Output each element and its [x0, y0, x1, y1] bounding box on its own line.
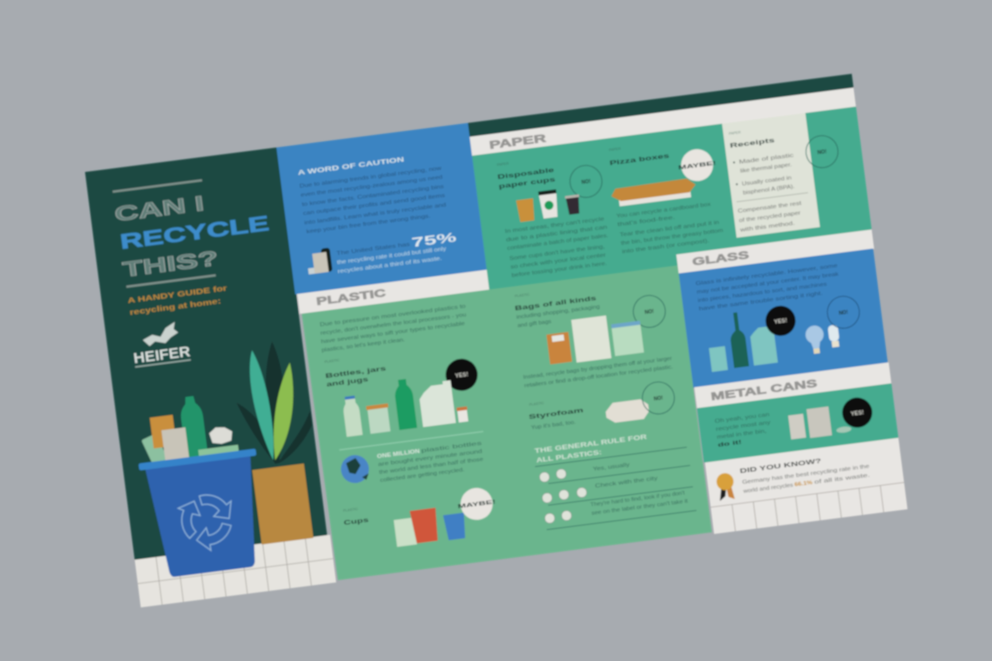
panel: paper: [472, 107, 873, 290]
cups: [342, 506, 369, 527]
icon: jar: [366, 403, 391, 434]
icon: milk bottle: [342, 395, 363, 437]
intro text: recycle, don't overwhelm the local processors - you: [320, 312, 467, 337]
panel: receipts: Receipts: [730, 137, 776, 150]
panel: receipts: Compensate the rest: [737, 201, 803, 215]
panel: receipts: bisphenol A (BPA).: [743, 184, 795, 197]
glass text: have the same trouble sorting it right.: [699, 291, 823, 313]
bin body: [145, 455, 264, 579]
icon: white bag: [571, 315, 611, 363]
bottles jars and jugs: [323, 352, 388, 389]
pizza text: Tear the clean lid off and put it in: [620, 220, 720, 239]
subtitle: [127, 283, 229, 317]
caution text: can outpace their profits and send good items: [303, 193, 446, 217]
icon: dark cup: [565, 194, 581, 215]
tiles right: [711, 482, 908, 534]
one million text: plastic bottles: [421, 441, 483, 455]
pizza text: the bin, but throw the greasy bottom: [621, 228, 724, 247]
rules table: see on the label or they can't take it: [591, 499, 689, 517]
icon: light bulb: [805, 325, 826, 355]
badge: no: NO!: [581, 179, 591, 186]
one million text: are bought every minute around: [378, 449, 483, 468]
caution text: Due to alarming trends in global recycling, now: [299, 166, 442, 190]
did you know text: of all its waste.: [814, 473, 870, 486]
stat text: recycles about a third of its waste.: [337, 256, 442, 275]
badge: yes glass: [764, 304, 797, 338]
did you know text: Germany has the best recycling rate in the: [742, 464, 870, 486]
header: glass: GLASS: [692, 249, 750, 269]
bin rim: [138, 449, 256, 471]
title: CAN I: [113, 191, 205, 226]
cups text: due to a plastic lining that can: [506, 225, 608, 244]
icon: globe: [339, 453, 371, 485]
title: [113, 183, 274, 282]
bags: and gift bags: [517, 319, 552, 329]
icon: large can: [806, 406, 832, 438]
cups: Cups: [343, 517, 369, 527]
metal text: [714, 412, 773, 449]
one million text: [377, 441, 486, 484]
pizza text: that's food-free.: [617, 215, 675, 228]
subtitle: recycling at home:: [129, 296, 222, 317]
header: paper: [470, 88, 856, 157]
stat text: the recycling rate it could but still only: [337, 246, 447, 266]
panel: receipts: [722, 113, 820, 238]
glass text: Glass is infinitely recyclable. However, some: [695, 263, 838, 287]
styrofoam: [527, 396, 585, 431]
green box: [198, 445, 239, 459]
rules table: [535, 447, 696, 530]
cups: PLASTIC: [343, 507, 359, 513]
icon: medal: [716, 472, 736, 501]
floor tiles left: [135, 535, 336, 607]
rules table: They're hard to find, look if you don't: [590, 490, 686, 508]
icon: white cup: [538, 189, 560, 219]
caution text: to know the facts. Contaminated recycling bins: [302, 184, 445, 208]
icon: pill bottle: [456, 406, 469, 423]
did you know text: world and recycles: [743, 483, 794, 495]
title rule bottom: [126, 274, 216, 288]
icon: orange cup: [516, 198, 536, 222]
metal text: recycle most any: [716, 420, 771, 433]
general rule heading: ALL PLASTICS:: [536, 450, 602, 464]
icon: plastic codes row 2: [541, 487, 587, 504]
icon: green bottle: [393, 378, 417, 430]
styrofoam: PLASTIC: [529, 401, 545, 407]
badge: yes glass: YES!: [774, 318, 788, 326]
header: paper: PAPER: [489, 133, 547, 152]
icon: pizza box: [610, 178, 697, 207]
header: metal cans: [694, 362, 891, 408]
glass text: may not be accepted at your center. It may break: [696, 272, 840, 296]
heading: A WORD OF CAUTION: [297, 156, 405, 177]
pizza text: into the trash (or compost).: [622, 238, 710, 255]
icon: carton and bottle: [306, 248, 333, 274]
cups text: [505, 216, 612, 279]
cups text: so check with your local center: [510, 252, 607, 271]
general rule heading: THE GENERAL RULE FOR: [534, 435, 648, 455]
green bottle: [178, 395, 208, 460]
icon: plastic codes row 3: [544, 510, 572, 524]
pizza text: You can recycle a cardboard box: [616, 202, 712, 220]
cups text: In most areas, they can't recycle: [505, 216, 605, 235]
badge: yes metal: YES!: [851, 410, 864, 417]
stat text: The United States has: [336, 242, 411, 257]
disposable paper cups: paper cups: [498, 176, 556, 191]
styrofoam: Yup it's bad, too.: [531, 420, 576, 431]
badge: no: [568, 164, 604, 199]
subtitle: A HANDY GUIDE for: [127, 283, 228, 305]
badge: no bags: NO!: [644, 309, 655, 316]
rules table: Yes, usually: [593, 462, 631, 473]
pizza text: [616, 201, 725, 256]
badge: no glass: NO!: [839, 310, 849, 317]
intro text: [318, 304, 469, 354]
panel: receipts: Usually coated in: [742, 175, 792, 188]
bags: PLASTIC: [515, 292, 530, 298]
icon: wine bottle: [727, 312, 749, 368]
header: glass: [676, 230, 874, 274]
icon: small jar: [709, 346, 728, 372]
pizza boxes: PAPER: [609, 147, 621, 152]
panel: a word of caution: [276, 123, 487, 294]
stat text: [335, 237, 448, 275]
styrofoam: Styrofoam: [528, 407, 584, 421]
did you know text: DID YOU KNOW?: [740, 459, 822, 475]
badge: no bags: [631, 294, 667, 329]
logo: Heifer: HEIFER: [133, 343, 191, 367]
icon: recycle symbol: [169, 492, 237, 560]
metal text: metal in the bin,: [717, 429, 767, 441]
plant: [229, 338, 326, 545]
icon: red cup: [410, 508, 440, 544]
panel: title sidebar: [85, 147, 327, 560]
caution text: even the most recycling-zealous among us need: [300, 175, 443, 199]
glass text: into pieces, hazardous to sort, and machines: [697, 282, 828, 304]
panel: did you know: [705, 438, 908, 534]
icon: small can: [788, 414, 806, 439]
badge: yes: YES!: [455, 372, 469, 380]
grey carton: [161, 427, 189, 463]
stat 75%: 75%: [411, 229, 458, 250]
did you know text: 66.1%: [794, 480, 813, 488]
pot: [252, 464, 313, 545]
header: plastic: PLASTIC: [316, 287, 387, 308]
cups text: before tossing your drink in here.: [511, 261, 607, 279]
icon: lid: [836, 426, 852, 434]
lime leaf: [263, 362, 302, 460]
bags text: [523, 356, 674, 389]
header: plastic: [297, 270, 489, 314]
badge: yes metal: [840, 396, 874, 429]
one million text: collected are getting recycled.: [380, 467, 465, 484]
intro text: have several ways to sift your types to recyclable: [321, 321, 465, 345]
recycling bin: [131, 389, 270, 580]
one million text: ONE MILLION: [377, 449, 420, 460]
bags: Bags of all kinds: [514, 295, 597, 313]
general rule heading: [534, 435, 649, 465]
panel: glass: [679, 248, 888, 388]
panel: receipts: Made of plastic: [739, 153, 795, 166]
icon: blue cup: [443, 513, 467, 541]
disposable paper cups: PAPER: [497, 162, 509, 167]
badge: no receipts: [804, 134, 840, 170]
panel: receipts: PAPER: [729, 130, 741, 136]
bottles jars and jugs: PLASTIC: [324, 358, 340, 364]
infographic card: [85, 74, 908, 607]
badge: maybe: MAYBE!: [678, 161, 717, 172]
logo: Heifer: [130, 320, 191, 368]
teal leaf: [246, 349, 277, 462]
disposable paper cups: [496, 156, 556, 191]
icon: orange bag: [546, 332, 572, 364]
bags text: retailers or find a drop-off location for recycled plastic.: [524, 364, 673, 389]
orange carton: [150, 415, 177, 449]
bottles jars and jugs: Bottles, jars: [325, 365, 387, 380]
pizza boxes: Pizza boxes: [609, 153, 670, 167]
icon: jug: [418, 380, 456, 427]
badge: no receipts: NO!: [817, 149, 827, 156]
badge: maybe: [676, 147, 719, 183]
caution text: keep your bin free from the wrong things.: [306, 213, 431, 235]
rules table: Check with the city: [595, 476, 659, 490]
did you know text: [740, 453, 871, 495]
bags text: Instead, recycle bags by dropping them off at your larger: [523, 356, 673, 381]
badge: maybe cups: [456, 486, 498, 522]
badge: no styrofoam: [640, 380, 676, 416]
icon: cfl bulb: [828, 325, 840, 348]
panel: plastic: [302, 265, 712, 580]
light green carton: [141, 433, 169, 467]
cups text: contaminate a batch of paper bales.: [507, 233, 609, 252]
badge: no styrofoam: NO!: [654, 395, 664, 403]
intro text: Due to pressure on most overlooked plastics to: [320, 304, 466, 328]
title rule top: [113, 179, 202, 193]
title: THIS?: [121, 246, 220, 282]
disposable paper cups: Disposable: [497, 167, 555, 181]
bags: including shopping, packaging: [516, 304, 600, 321]
glass text: [695, 263, 842, 313]
header: metal cans: METAL CANS: [710, 378, 818, 403]
icon: cream cup: [394, 518, 417, 547]
dark leaves: [229, 338, 316, 468]
one million text: the world and less than half of those: [379, 457, 484, 476]
cups text: Some cups don't have the lining,: [509, 244, 605, 262]
divider: [339, 431, 483, 450]
metal text: Oh yeah, you can: [714, 412, 770, 425]
panel: metal cans: [697, 383, 898, 463]
intro text: plastics, so let's keep it clean.: [321, 337, 405, 354]
metal text: do it!: [718, 440, 743, 449]
bottles jars and jugs: and jugs: [326, 376, 369, 389]
badge: no glass: [825, 294, 861, 330]
icon: clamshell: [605, 398, 650, 424]
bags: [513, 284, 601, 330]
panel: receipts: of the recycled paper: [739, 210, 801, 224]
icon: plastic codes row 1: [539, 468, 567, 483]
badge: yes: [444, 357, 480, 393]
badge: maybe cups: MAYBE!: [458, 499, 497, 510]
caution text: into landfills. Learn what is truly recyclable and: [304, 202, 447, 226]
icon: blue top bag: [611, 321, 644, 356]
paper ball: [209, 425, 234, 445]
top strip: [468, 74, 854, 137]
pizza boxes: [608, 141, 670, 167]
icon: big jar: [749, 326, 778, 366]
caution text: [299, 166, 448, 235]
panel: receipts: with this method.: [740, 221, 795, 234]
title: RECYCLE: [119, 211, 271, 254]
panel: receipts: like thermal paper.: [740, 162, 792, 175]
